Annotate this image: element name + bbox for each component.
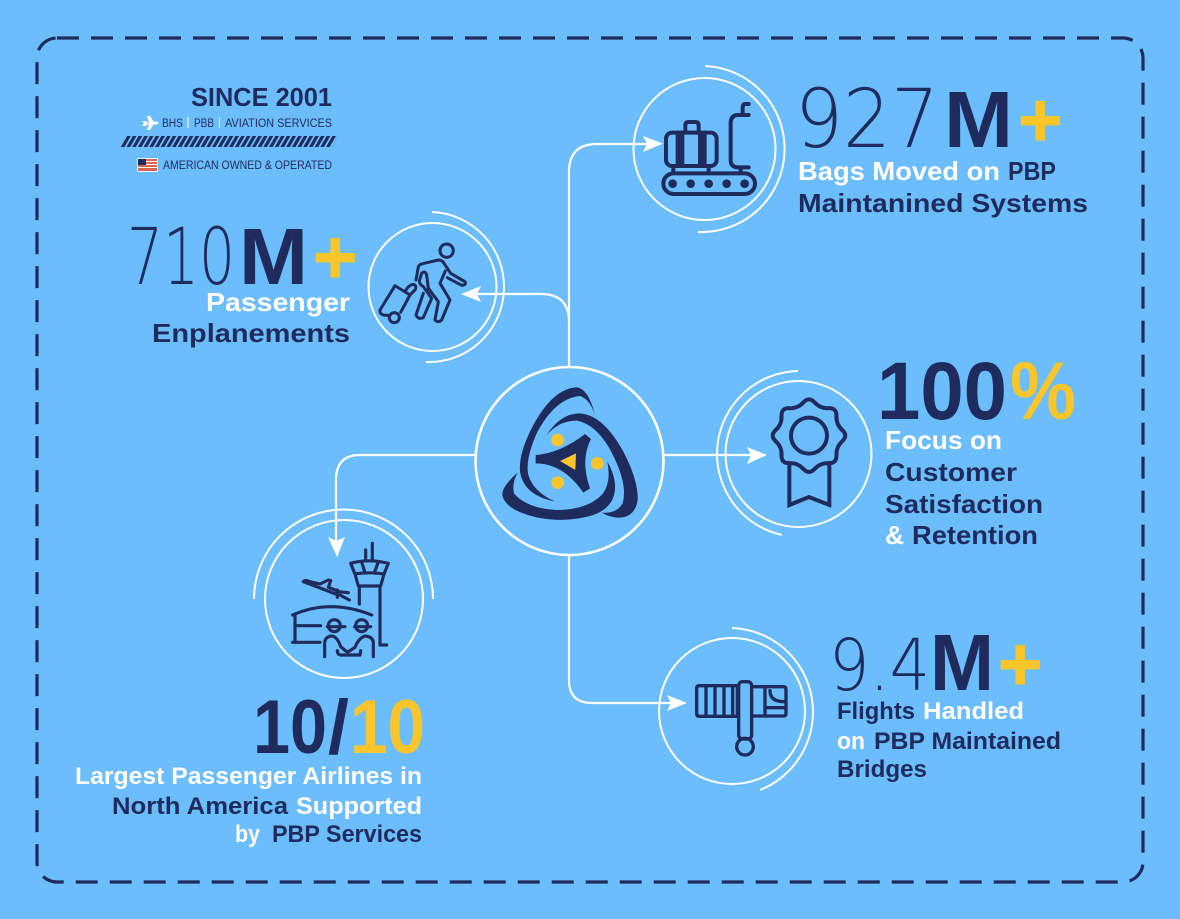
label: largest airlines: Largest Passenger Airlines in: [75, 763, 422, 790]
number 710M+: +: [313, 215, 357, 300]
header: since 2001: [124, 82, 335, 172]
label: flights handled: on: [837, 728, 865, 755]
number 9.4M+: M: [930, 618, 994, 707]
services line: BHS: [162, 118, 183, 130]
number 927M+: M: [944, 75, 1013, 164]
label: customer focus: Focus on: [885, 425, 1002, 455]
label: largest airlines: [75, 763, 422, 848]
central logo: [476, 367, 664, 555]
hatched bar: [124, 136, 335, 147]
label: customer focus: Customer: [885, 457, 1017, 487]
stat: flights handled: [829, 618, 1061, 783]
label: largest airlines: Supported: [296, 793, 422, 820]
icon: award ribbon: [717, 371, 872, 535]
arrow: to award: [747, 447, 767, 464]
icon: passenger with luggage: [368, 212, 504, 362]
services line: [162, 117, 332, 130]
number 710M+: M: [239, 212, 308, 301]
icon: airport tower and handshake: [254, 509, 433, 678]
label: flights handled: Flights: [837, 698, 915, 725]
arrow: to bridge: [667, 695, 687, 711]
label: passenger enplanements: Passenger: [206, 287, 350, 317]
icon: plane: [142, 116, 158, 130]
label: passenger enplanements: [152, 287, 350, 348]
number 10/10: [253, 685, 425, 770]
services line: AVIATION SERVICES: [225, 118, 332, 130]
label: largest airlines: PBP Services: [272, 821, 422, 848]
label: bags moved: [798, 156, 1088, 218]
number 927M+: +: [1018, 78, 1062, 163]
number 100%: 100: [877, 346, 1007, 437]
arrow: to baggage: [643, 136, 663, 152]
arrow: to passenger: [461, 286, 481, 302]
label: largest airlines: North America: [112, 793, 289, 820]
number 927M+: [795, 73, 1062, 167]
stat: largest airlines: [75, 685, 425, 848]
arrow: to airport: [328, 537, 345, 557]
label: flights handled: PBP Maintained: [874, 728, 1061, 755]
number 100%: %: [1010, 346, 1076, 437]
label: passenger enplanements: Enplanements: [152, 318, 350, 348]
connector lines and arrows: [328, 136, 767, 711]
number 10/10: /: [328, 685, 349, 770]
number 10/10: 10: [350, 685, 425, 770]
stat: bags moved: [795, 73, 1088, 218]
number 710M+: [127, 212, 357, 303]
icon: american flag: [137, 158, 158, 172]
label: bags moved: Bags Moved on: [798, 156, 1000, 186]
number 9.4M+: +: [998, 622, 1042, 707]
label: bags moved: PBP: [1008, 156, 1056, 186]
number 9.4M+: 9.4: [829, 624, 930, 707]
number 10/10: 10: [253, 685, 327, 770]
stat: customer focus: [877, 346, 1076, 550]
label: customer focus: &: [885, 520, 904, 550]
label: largest airlines: by: [235, 821, 261, 848]
label: customer focus: Retention: [912, 520, 1038, 550]
icon: baggage conveyor: [634, 66, 785, 232]
number 100%: [877, 346, 1076, 437]
heading: since 2001: SINCE 2001: [191, 82, 332, 112]
number 927M+: 927: [795, 73, 939, 167]
label: bags moved: Maintanined Systems: [798, 188, 1088, 218]
number 710M+: 710: [127, 213, 235, 303]
number 9.4M+: [829, 618, 1042, 707]
label: flights handled: [837, 698, 1061, 783]
label: flights handled: Bridges: [837, 756, 927, 783]
services line: PBB: [194, 118, 214, 130]
label: customer focus: [885, 425, 1043, 550]
icon: passenger boarding bridge: [659, 628, 813, 790]
stat: passenger enplanements: [127, 212, 357, 348]
label: customer focus: Satisfaction: [885, 489, 1043, 519]
owned and operated line: AMERICAN OWNED & OPERATED: [163, 160, 332, 172]
label: flights handled: Handled: [923, 698, 1024, 725]
